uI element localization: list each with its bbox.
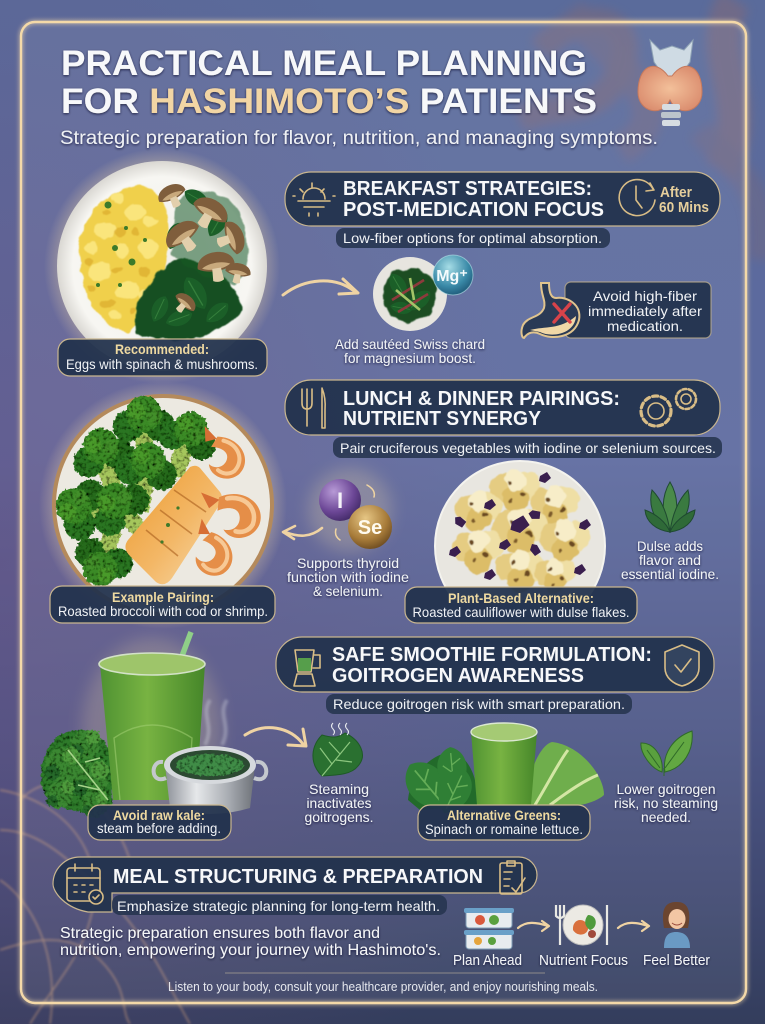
icon: clipboard checklist (500, 861, 525, 894)
arrow: plate to Swiss chard (283, 279, 358, 295)
text: lower goitrogen: risk, no steaming (614, 795, 718, 811)
callout: example pairing (50, 586, 275, 623)
heading: breakfast strategies (285, 172, 720, 226)
callout: recommended (58, 339, 267, 376)
text: Swiss chard: for magnesium boost. (344, 350, 476, 366)
subheading: reduce goitrogen: Reduce goitrogen risk with smart preparation. (333, 696, 625, 712)
text: dulse: flavor and (639, 552, 701, 568)
icon: nutrient plate (556, 905, 607, 945)
callout: avoid high-fiber: immediately after (588, 303, 702, 319)
icon: steamed kale leaf (313, 723, 362, 776)
arrow: nutrient to feel better (618, 921, 649, 931)
callout: alternative greens: Alternative Greens: (447, 807, 561, 823)
icon: sunrise (293, 183, 335, 216)
icon: shield (665, 645, 699, 686)
icon: blender (294, 650, 320, 686)
heading: meal structuring and preparation (53, 857, 537, 912)
panel: lunch and dinner (39, 380, 722, 631)
label: feel better: Feel Better (643, 952, 710, 969)
text: strategic preparation: nutrition, empowering your journey with Hashimoto's. (60, 942, 441, 959)
callout: avoid raw kale: Avoid raw kale: (113, 807, 205, 823)
illustration: green smoothie with kale (41, 632, 266, 822)
callout: avoid raw kale (88, 805, 231, 840)
text: strategic preparation: Strategic preparation ensures both flavor and (60, 925, 380, 942)
icon: stomach (521, 283, 579, 338)
footer note: Listen to your body, consult your healthcare provider, and enjoy nourishing meals. (168, 980, 598, 994)
text: steaming: inactivates (306, 795, 372, 811)
callout: recommended: Recommended: (115, 341, 209, 357)
callout: alternative greens: Spinach or romaine lettuce. (425, 821, 583, 837)
subheading: low-fiber: Low-fiber options for optimal absorption. (343, 230, 602, 246)
icon: calendar (67, 864, 103, 904)
subtitle: Strategic preparation for flavor, nutrition, and managing symptoms. (60, 128, 658, 149)
panel: meal structuring (53, 857, 710, 969)
subheading: emphasize planning: Emphasize strategic planning for long-term health. (117, 898, 440, 914)
icon: iodine and selenium: Se (358, 517, 382, 539)
text: dulse (621, 538, 719, 582)
icon: happy person (663, 902, 690, 948)
text: supports thyroid: & selenium. (313, 583, 383, 599)
callout: plant-based alternative: Plant-Based Alternative: (448, 590, 594, 606)
heading: safe smoothie formulation (276, 637, 714, 692)
text: supports thyroid (287, 555, 409, 599)
title: PRACTICAL MEAL PLANNING (61, 44, 587, 83)
callout: avoid high-fiber (565, 282, 711, 338)
callout: example pairing: Example Pairing: (112, 589, 214, 605)
text: supports thyroid: Supports thyroid (297, 555, 399, 571)
arrow: selenium to plate (283, 526, 322, 539)
heading: safe smoothie formulation: GOITROGEN AWARENESS (332, 664, 584, 687)
heading: lunch and dinner pairings: LUNCH & DINNER PAIRINGS: (343, 387, 620, 410)
icon: meal prep containers (464, 908, 514, 949)
plate: roasted cauliflower (434, 460, 606, 600)
icon: thyroid gland (638, 40, 702, 126)
illustration: spinach, romaine and smoothie (396, 723, 604, 820)
label: plan ahead: Plan Ahead (453, 952, 522, 969)
callout: plant-based alternative: Roasted cauliflower with dulse flakes. (412, 604, 630, 620)
label: nutrient focus: Nutrient Focus (539, 952, 628, 969)
text: dulse: essential iodine. (621, 566, 719, 582)
icon: iodine and selenium: I (337, 488, 343, 513)
subheading: pair cruciferous: Pair cruciferous vegetables with iodine or selenium sources. (340, 440, 716, 456)
icon: green leaves (641, 731, 692, 776)
heading: breakfast strategies: 60 Mins (659, 200, 709, 216)
callout: plant-based alternative (405, 587, 637, 623)
title: FOR HASHIMOTO’S PATIENTS (61, 82, 597, 121)
icon: iodine and selenium (308, 468, 392, 552)
heading: breakfast strategies: After (660, 185, 692, 201)
icon: magnesium: Mg⁺ (436, 268, 468, 285)
panel: smoothie (41, 632, 718, 840)
icon: fork and knife (302, 388, 325, 428)
heading: lunch and dinner pairings: NUTRIENT SYNERGY (343, 407, 541, 430)
icon: straw (176, 632, 191, 672)
text: supports thyroid: function with iodine (287, 569, 409, 585)
callout: example pairing: Roasted broccoli with cod or shrimp. (58, 603, 268, 619)
callout: alternative greens (418, 805, 590, 840)
text: lower goitrogen (614, 781, 718, 825)
arrow: plan to nutrient (518, 921, 549, 931)
text: strategic preparation (60, 925, 441, 959)
heading: lunch and dinner pairings (285, 380, 720, 435)
plate: eggs with spinach and mushrooms (44, 148, 280, 384)
heading: breakfast strategies: POST-MEDICATION FOCUS (343, 198, 604, 221)
icon: clock (619, 180, 655, 216)
text: Swiss chard (335, 336, 485, 366)
icon: magnesium (433, 255, 473, 295)
arrow: pot to kale leaf (245, 728, 306, 746)
text: dulse: Dulse adds (637, 538, 703, 554)
plate: broccoli with fish and shrimp (39, 381, 287, 629)
heading: meal structuring and preparation: MEAL STRUCTURING & PREPARATION (113, 865, 483, 888)
text: lower goitrogen: Lower goitrogen (616, 781, 716, 797)
text: steaming: goitrogens. (304, 809, 374, 825)
heading: breakfast strategies: BREAKFAST STRATEGIES: (343, 177, 592, 200)
icon: dulse seaweed (645, 482, 695, 532)
text: Swiss chard: Add sautéed Swiss chard (335, 336, 485, 352)
icon: steaming pot (154, 746, 266, 814)
text: steaming: Steaming (309, 781, 369, 797)
heading: safe smoothie formulation: SAFE SMOOTHIE FORMULATION: (332, 643, 652, 666)
text: lower goitrogen: needed. (641, 809, 691, 825)
plate: Swiss chard (373, 257, 447, 331)
text: steaming (304, 781, 374, 825)
panel: breakfast (44, 148, 720, 384)
callout: avoid high-fiber: Avoid high-fiber (593, 288, 697, 304)
callout: avoid raw kale: steam before adding. (97, 820, 221, 836)
title (61, 44, 597, 121)
icon: gears (641, 389, 696, 426)
callout: recommended: Eggs with spinach & mushrooms. (66, 356, 258, 372)
callout: avoid high-fiber: medication. (607, 318, 683, 334)
